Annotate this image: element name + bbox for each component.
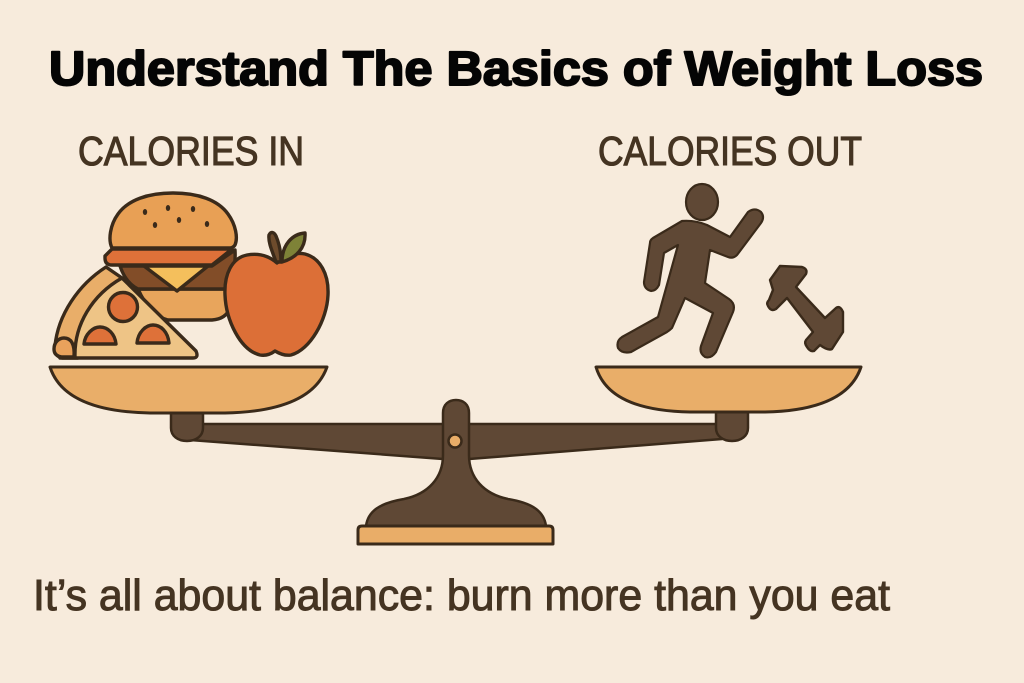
icon: food: [54, 193, 328, 358]
caption: It’s all about balance: burn more than you eat: [33, 571, 890, 620]
heading: calories out: CALORIES OUT: [598, 128, 862, 174]
icon: burger: [105, 193, 236, 320]
pivot: [448, 434, 462, 448]
icon: runner: [618, 184, 763, 357]
scale base: [358, 526, 553, 544]
scale beam: [190, 424, 722, 459]
icon: pizza slice: [54, 267, 197, 358]
icon: apple: [225, 232, 328, 355]
left pan support: [171, 411, 203, 441]
heading: calories in: CALORIES IN: [78, 128, 304, 174]
right pan support: [716, 411, 748, 441]
scale stand: [366, 400, 546, 526]
scale: [171, 400, 748, 544]
left pan: [50, 367, 327, 413]
icon: dumbbell: [767, 266, 843, 351]
title: Understand The Basics of Weight Loss: [49, 43, 983, 96]
right pan: [596, 367, 861, 412]
